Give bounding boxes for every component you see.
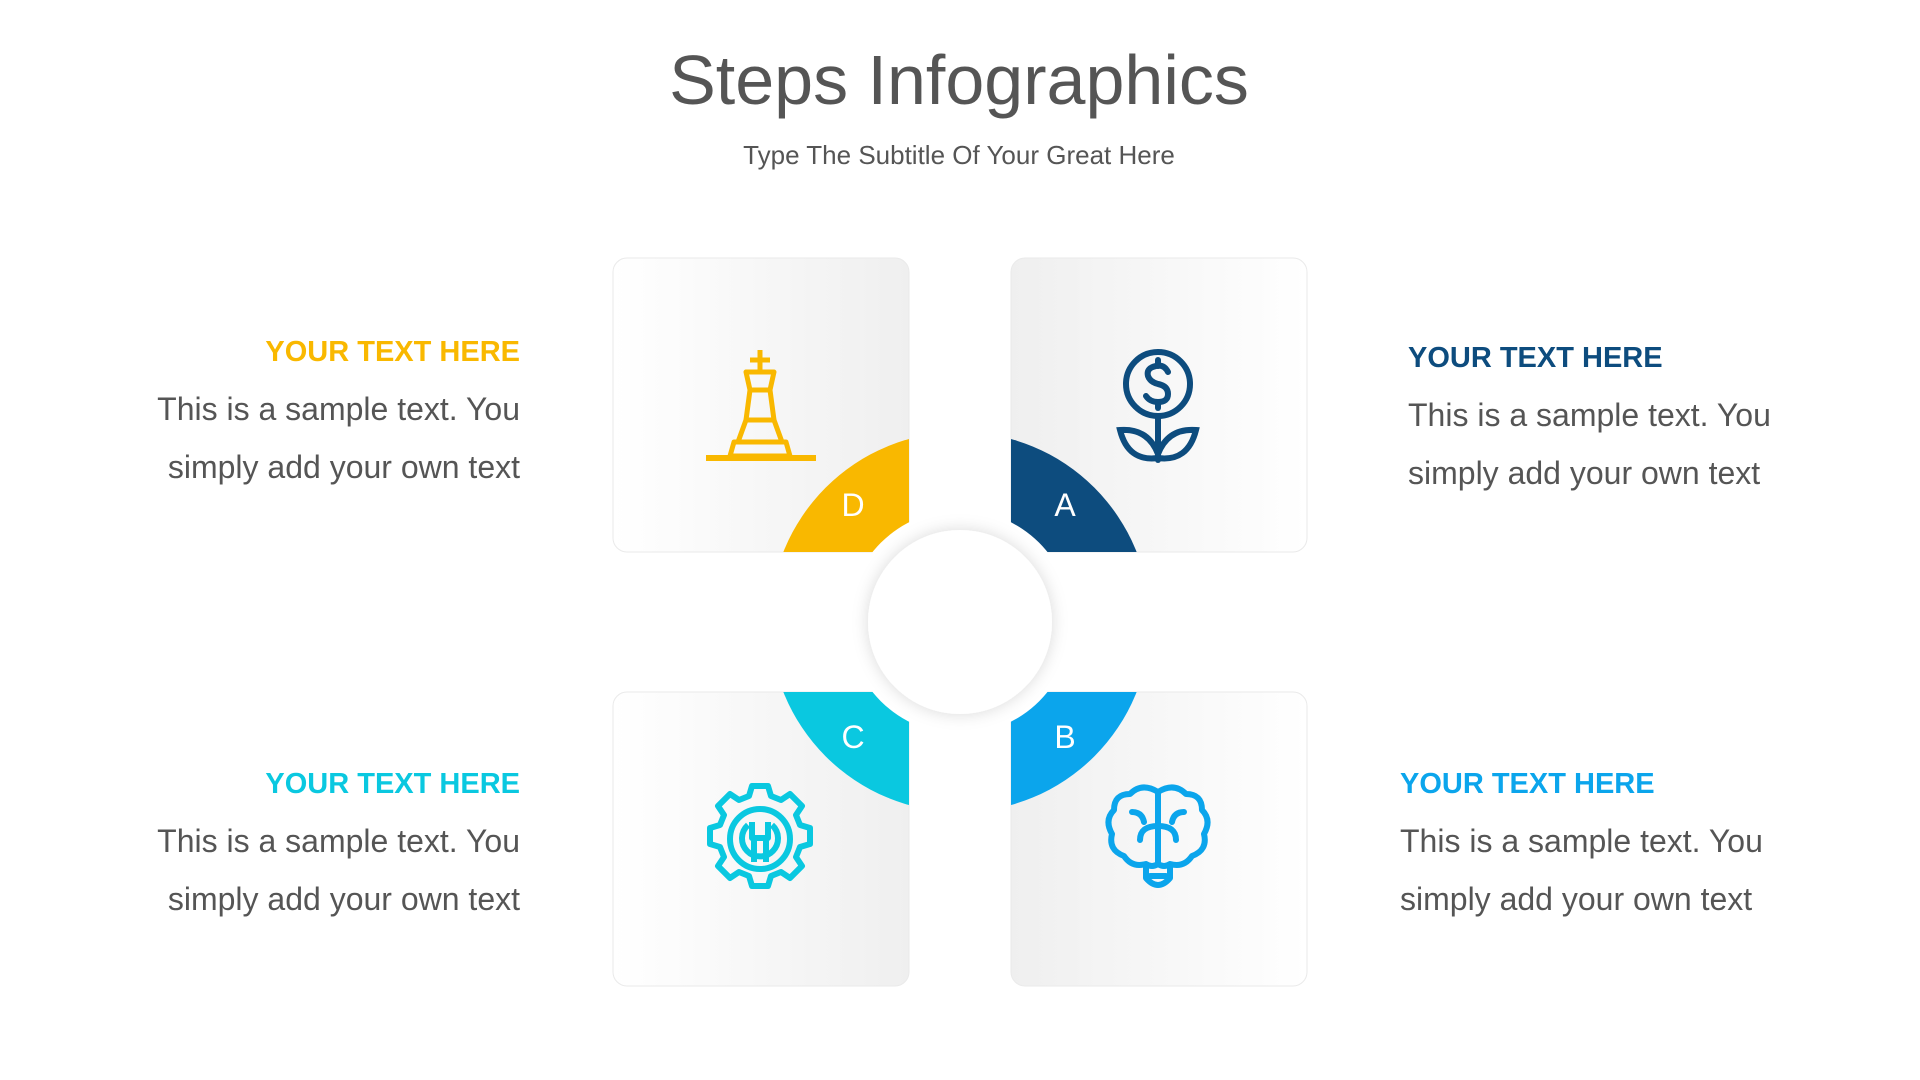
icon: dollar flower bbox=[1120, 352, 1196, 460]
icon: gear with wrench bbox=[710, 786, 810, 886]
text block A: This is a sample text. You bbox=[1408, 397, 1771, 433]
text block C: This is a sample text. You bbox=[157, 823, 520, 859]
text block C: YOUR TEXT HERE bbox=[265, 768, 520, 800]
text block C bbox=[157, 768, 520, 917]
card D bbox=[612, 258, 910, 552]
card A bbox=[1010, 258, 1308, 552]
text block A: YOUR TEXT HERE bbox=[1408, 342, 1663, 374]
text block B bbox=[1400, 768, 1763, 917]
letter D: D bbox=[841, 487, 865, 523]
text block D: simply add your own text bbox=[168, 449, 520, 485]
text block C: simply add your own text bbox=[168, 881, 520, 917]
letter B: B bbox=[1054, 719, 1076, 755]
text block D: YOUR TEXT HERE bbox=[265, 336, 520, 368]
text block B: simply add your own text bbox=[1400, 881, 1752, 917]
text block D: This is a sample text. You bbox=[157, 391, 520, 427]
text block A bbox=[1408, 342, 1771, 491]
icon: chess king bbox=[706, 350, 816, 458]
text block B: This is a sample text. You bbox=[1400, 823, 1763, 859]
card B bbox=[1010, 692, 1308, 986]
text block A: simply add your own text bbox=[1408, 455, 1760, 491]
text block D bbox=[157, 336, 520, 485]
letter C: C bbox=[841, 719, 865, 755]
center circle bbox=[848, 510, 1072, 734]
letter A: A bbox=[1054, 487, 1076, 523]
text block B: YOUR TEXT HERE bbox=[1400, 768, 1655, 800]
icon: brain bulb bbox=[1108, 787, 1208, 885]
subtitle: Type The Subtitle Of Your Great Here bbox=[743, 140, 1175, 170]
card C bbox=[612, 692, 910, 986]
title: Steps Infographics bbox=[669, 41, 1249, 119]
